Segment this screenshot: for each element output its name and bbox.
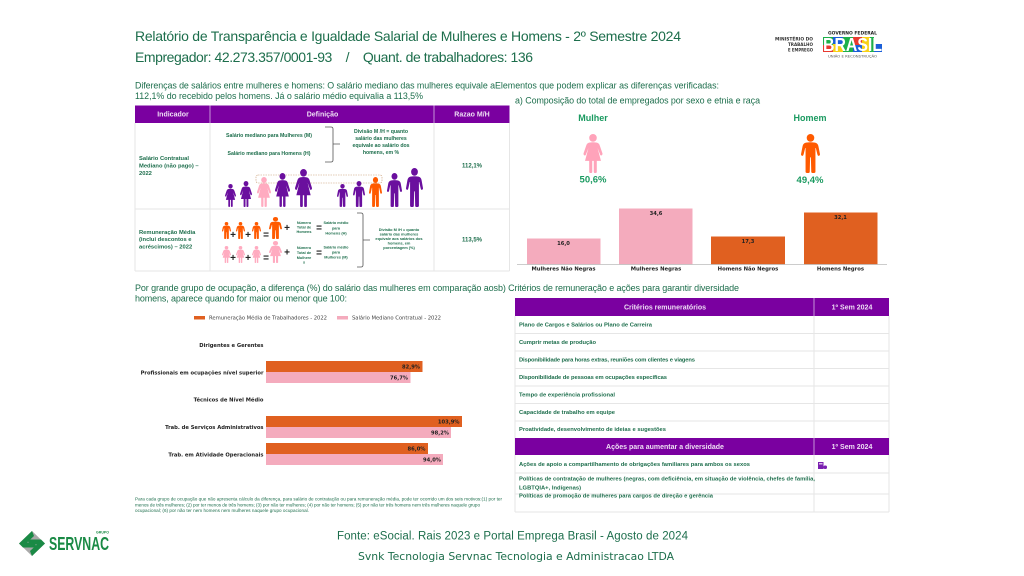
- ministry name: E EMPREGO: [788, 48, 814, 52]
- legend: [194, 314, 441, 322]
- criteria header: Critérios remuneratórios: [624, 304, 706, 312]
- bar chart: 32,1: [834, 215, 847, 221]
- men formula labels: Total de: [297, 226, 311, 230]
- Brasil wordmark: BRASIL: [823, 35, 882, 55]
- legend: Remuneração Média de Trabalhadores - 2022: [209, 314, 327, 322]
- table header: Definição: [307, 112, 338, 118]
- criteria header: 1º Sem 2024: [832, 304, 872, 312]
- value: 113,5%: 113,5%: [462, 238, 483, 244]
- division explanation: homens, em %: [363, 150, 400, 156]
- figures: women row: [225, 169, 312, 207]
- wordmark: SERVNAC: [49, 534, 109, 554]
- panel: criteria and actions table: [515, 298, 889, 512]
- division explanation: salário das mulheres: [355, 136, 407, 142]
- division explanation: Divisão M /H = quanto: [379, 227, 420, 232]
- median labels: Salário mediano para Homens (H): [227, 151, 311, 157]
- category labels: Trab. em Atividade Operacionais: [168, 452, 264, 458]
- criteria header: [515, 298, 889, 316]
- men formula operators: =: [263, 230, 269, 241]
- women formula labels: s: [303, 260, 305, 264]
- tagline: UNIÃO E RECONSTRUÇÃO: [828, 54, 877, 58]
- Mulher pictogram: [578, 113, 608, 186]
- bar chart: [517, 208, 887, 272]
- table header: Indicador: [157, 112, 189, 118]
- heading: occupation difference: Por grande grupo de ocupação, a diferença (%) do salário das mulheres em comparação aos: [135, 283, 498, 293]
- row label: contractual median: Mediano (não pago) –: [139, 164, 199, 170]
- division explanation: equivale ao salário dos: [352, 143, 410, 149]
- actions list: [519, 462, 815, 500]
- division explanation: homens, em: [388, 240, 411, 246]
- actions header: 1º Sem 2024: [832, 444, 872, 451]
- logo: Servnac: [19, 530, 109, 556]
- value labels: 76,7%: [390, 376, 409, 382]
- brace: [357, 213, 370, 267]
- bar chart: Homens Negros: [817, 266, 864, 272]
- women formula labels: Número: [297, 246, 312, 250]
- category labels: Técnicos de Nível Médio: [194, 396, 264, 404]
- men formula operators: =: [316, 223, 322, 234]
- bar chart: Mulheres Negras: [631, 266, 681, 272]
- bar chart: Homens Não Negros: [718, 266, 778, 272]
- women formula operators: =: [263, 253, 269, 264]
- bar chart: 16,0: [557, 241, 570, 247]
- category labels: Dirigentes e Gerentes: [199, 343, 264, 349]
- category labels: [141, 343, 264, 458]
- median labels: [226, 133, 312, 157]
- title: [135, 28, 681, 65]
- women formula labels: Salário médio: [324, 246, 349, 250]
- women formula operators: +: [284, 248, 290, 258]
- category labels: Trab. de Serviços Administrativos: [165, 425, 264, 431]
- icon: marked action: [818, 462, 827, 469]
- dashed median highlight: [256, 175, 382, 183]
- women formula operators: +: [245, 253, 251, 264]
- row definition: average pay: [222, 213, 423, 267]
- criteria list: Capacidade de trabalho em equipe: [519, 410, 616, 416]
- division explanation: porcentagem (%): [383, 245, 415, 250]
- row definition: median salary: [225, 127, 423, 207]
- ministry name: [775, 36, 814, 52]
- value: 112,1%: 112,1%: [462, 164, 483, 170]
- footnote: Para cada grupo de ocupação que não apresenta cálculo da diferença, para salário de contratação ou para remuneração média, pode ter ocorrido um dos seis motivos:(1) por ter: [135, 496, 502, 502]
- men formula operators: [230, 223, 322, 241]
- women formula operators: +: [230, 253, 236, 264]
- row label: average pay: (inclui descontos e: [139, 237, 192, 243]
- footnote: ocupacional; (6) por não ter nem homens nem mulheres naquele grupo ocupacional.: [135, 508, 309, 513]
- text block: salary differences: Diferenças de salários entre mulheres e homens: O salário mediano das mulheres equivale a: [135, 80, 495, 90]
- men formula labels: Homens (H): [325, 232, 347, 236]
- bar chart: Mulheres Não Negras: [531, 266, 596, 272]
- women formula labels: Mulheres (M): [324, 256, 348, 260]
- value labels: [390, 364, 460, 464]
- actions header: Ações para aumentar a diversidade: [606, 444, 724, 451]
- Homem pictogram: Homem: [793, 113, 827, 123]
- table header: Razao M/H: [454, 112, 490, 118]
- value labels: 82,9%: [402, 364, 421, 370]
- actions list: Ações de apoio a compartilhamento de obrigações familiares para ambos os sexos: [519, 462, 750, 468]
- criteria list: Proatividade, desenvolvimento de ideias e sugestões: [519, 427, 666, 433]
- table header: [135, 106, 510, 123]
- row label: average pay: Remuneração Média: [139, 230, 196, 236]
- logo mark: [19, 531, 45, 556]
- criteria list: Disponibilidade de pessoas em ocupações específicas: [519, 375, 667, 381]
- men formula operators: +: [245, 230, 251, 241]
- division explanation: Divisão M /H = quanto: [354, 129, 408, 135]
- criteria list: [519, 322, 695, 433]
- women formula operators: =: [316, 248, 322, 259]
- men formula labels: para: [332, 226, 341, 230]
- source line: Fonte: eSocial. Rais 2023 e Portal Emprega Brasil - Agosto de 2024: [337, 530, 689, 542]
- men formula operators: +: [230, 230, 236, 241]
- men formula operators: +: [284, 223, 290, 234]
- criteria list: Cumprir metas de produção: [519, 340, 596, 346]
- logo: Ministério do Trabalho e Governo Federal: [775, 30, 882, 58]
- heading: composition: a) Composição do total de empregados por sexo e etnia e raça: [515, 96, 760, 106]
- women formula: [222, 241, 282, 263]
- legend: Salário Mediano Contratual - 2022: [352, 314, 441, 322]
- actions list: Políticas de contratação de mulheres (negras, com deficiência, em situação de violência, chefes de família,: [519, 476, 815, 482]
- women formula labels: Total de: [297, 251, 311, 255]
- actions list: Políticas de promoção de mulheres para cargos de direção e gerência: [519, 494, 714, 500]
- women formula labels: Mulhere: [297, 256, 311, 260]
- panel: composition by sex and race: [517, 113, 887, 272]
- division explanation: salário das mulheres: [380, 232, 418, 236]
- figures: men row: [337, 168, 423, 207]
- division explanation: equivale aos salários dos: [375, 236, 423, 241]
- Homem pictogram: 49,4%: [797, 175, 824, 186]
- actions list: LGBTQIA+, Indígenas): [519, 486, 581, 492]
- Homem pictogram: [793, 113, 827, 186]
- heading: explaining elements: Elementos que podem explicar as diferenças verificadas:: [495, 80, 719, 90]
- men formula labels: Homens: [297, 230, 311, 234]
- grupo label: GRUPO: [96, 530, 109, 534]
- row label: average pay: acréscimos) – 2022: [139, 244, 192, 250]
- actions header: [515, 438, 889, 455]
- criteria list: Tempo de experiência profissional: [519, 392, 615, 398]
- Governo Federal label: GOVERNO FEDERAL: [828, 30, 877, 36]
- men formula: [222, 217, 282, 239]
- men formula labels: Número: [297, 221, 312, 225]
- median labels: Salário mediano para Mulheres (M): [226, 133, 312, 139]
- bar chart: 17,3: [742, 239, 755, 245]
- ministry name: MINISTÉRIO DO: [775, 36, 814, 42]
- text block: salary differences: [135, 80, 495, 101]
- heading: occupation difference: homens, aparece quando for maior ou menor que 100:: [135, 294, 347, 304]
- panel: occupation bar chart: [141, 314, 462, 465]
- panel: indicator table: [135, 106, 510, 271]
- Mulher pictogram: 50,6%: [580, 174, 607, 186]
- value labels: 94,0%: [423, 458, 442, 464]
- footnote: menos de três mulheres; (2) por ter menos de três homens; (3) por não ter mulheres; (4) por não ter homens; (5) por não ter três homens nem três mulheres naquele grupo: [135, 502, 480, 507]
- ministry name: TRABALHO: [788, 42, 814, 47]
- row label: contractual median: Salário Contratual: [139, 156, 189, 162]
- women formula operators: [230, 248, 322, 264]
- men formula labels: Salário médio: [324, 221, 349, 225]
- criteria list: Plano de Cargos e Salários ou Plano de Carreira: [519, 322, 653, 328]
- employer line: Empregador: 42.273.357/0001-93 / Quant. de trabalhadores: 136: [135, 49, 533, 65]
- value labels: 86,0%: [408, 446, 426, 452]
- criteria list: Disponibilidade para horas extras, reuniões com clientes e viagens: [519, 358, 695, 364]
- value labels: 98,2%: [431, 430, 450, 436]
- Mulher pictogram: Mulher: [578, 113, 608, 123]
- women formula labels: para: [332, 250, 341, 254]
- brace: [325, 127, 340, 162]
- title: Relatório de Transparência e Igualdade Salarial de Mulheres e Homens - 2º Semestre 2024: [135, 28, 681, 44]
- text block: salary differences: 112,1% do recebido pelos homens. Já o salário médio equivalia a 113,5%: [135, 91, 423, 101]
- category labels: Profissionais em ocupações nível superior: [141, 370, 264, 376]
- row label: contractual median: 2022: [139, 171, 152, 177]
- heading: occupation difference: [135, 283, 498, 304]
- company name: Svnk Tecnologia Servnac Tecnologia e Administracao LTDA: [358, 550, 674, 563]
- bar chart: 34,6: [650, 211, 663, 217]
- value labels: 103,9%: [438, 420, 460, 426]
- bars: [266, 361, 462, 465]
- heading: criteria and actions: b) Critérios de remuneração e ações para garantir diversidade: [498, 283, 739, 293]
